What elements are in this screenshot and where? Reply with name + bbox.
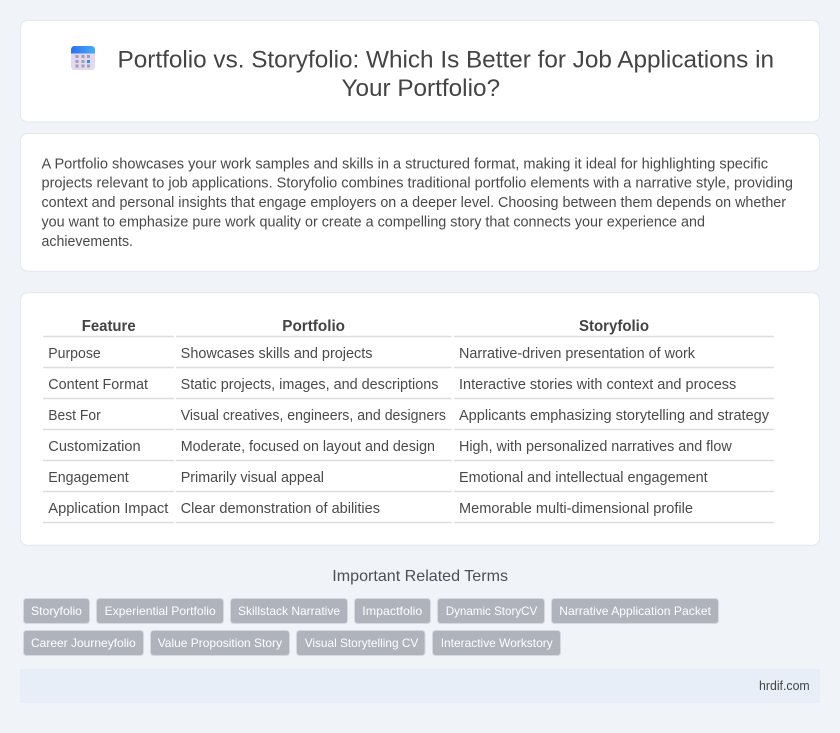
row: content format: Interactive stories with context and process — [459, 377, 736, 393]
row: best for — [48, 408, 770, 424]
tag: Interactive Workstory — [432, 630, 560, 656]
row: purpose: Purpose — [48, 346, 101, 362]
tag: Skillstack Narrative: Skillstack Narrative — [238, 604, 340, 618]
row: content format — [48, 377, 736, 393]
tag: Career Journeyfolio — [24, 630, 144, 656]
tag: Dynamic StoryCV — [438, 598, 544, 624]
row: customization — [48, 439, 732, 455]
table header: Portfolio — [282, 318, 345, 335]
row: customization: High, with personalized narratives and flow — [459, 439, 732, 455]
row: engagement: Primarily visual appeal — [181, 470, 324, 486]
title: Portfolio vs. Storyfolio: Which Is Better for Job Applications in — [118, 46, 774, 74]
intro text: context and personal insights that engage employers on a deeper level. Choosing between them depends on whether — [42, 195, 786, 211]
footer source: hrdif.com — [759, 679, 810, 693]
tag: Dynamic StoryCV: Dynamic StoryCV — [446, 604, 537, 618]
intro text — [42, 156, 793, 250]
panel: title card — [20, 20, 820, 122]
tag: Storyfolio: Storyfolio — [31, 604, 82, 618]
table header: Feature — [82, 318, 136, 335]
row: application impact: Memorable multi-dimensional profile — [459, 501, 693, 517]
tag: Narrative Application Packet: Narrative Application Packet — [559, 604, 712, 618]
row: application impact: Application Impact — [48, 501, 168, 517]
row: content format: Content Format — [48, 377, 148, 393]
tag: Experiential Portfolio — [96, 598, 224, 624]
title: Your Portfolio? — [342, 75, 500, 102]
panel: intro paragraph — [20, 134, 820, 271]
tag: Career Journeyfolio: Career Journeyfolio — [31, 636, 136, 650]
tag: Visual Storytelling CV: Visual Storytelling CV — [305, 636, 418, 650]
tag: Storyfolio — [24, 598, 90, 624]
heading: important related terms: Important Related Terms — [332, 568, 508, 585]
row: application impact — [48, 501, 693, 517]
row: purpose — [48, 346, 696, 362]
footer bar — [20, 669, 820, 703]
row: engagement — [48, 470, 708, 486]
tag: Impactfolio: Impactfolio — [362, 604, 423, 618]
title — [118, 46, 774, 102]
row: customization: Customization — [48, 439, 141, 455]
row: best for: Applicants emphasizing storytelling and strategy — [459, 408, 770, 424]
row: customization: Moderate, focused on layout and design — [181, 439, 435, 455]
tag: Visual Storytelling CV — [296, 630, 425, 656]
row: best for: Visual creatives, engineers, and designers — [181, 408, 446, 424]
tag: Value Proposition Story — [150, 630, 290, 656]
row: engagement: Emotional and intellectual engagement — [459, 470, 708, 486]
row: content format: Static projects, images, and descriptions — [181, 377, 438, 393]
tags: related terms — [24, 598, 718, 656]
panel: comparison table — [20, 293, 820, 545]
icon: calendar — [71, 46, 95, 70]
row: best for: Best For — [48, 408, 101, 424]
intro text: A Portfolio showcases your work samples and skills in a structured format, making it ideal for highlighting specific — [42, 156, 768, 172]
tag: Narrative Application Packet — [552, 598, 718, 624]
tag: Interactive Workstory: Interactive Workstory — [441, 636, 553, 650]
row: purpose: Narrative-driven presentation of work — [459, 346, 696, 362]
tag: Skillstack Narrative — [230, 598, 348, 624]
row: application impact: Clear demonstration of abilities — [181, 501, 380, 517]
row: engagement: Engagement — [48, 470, 129, 486]
intro text: projects relevant to job applications. Storyfolio combines traditional portfolio elements with a narrative style, providing — [42, 176, 793, 192]
tag: Impactfolio — [354, 598, 430, 624]
table rules — [43, 336, 774, 522]
tag: Value Proposition Story: Value Proposition Story — [158, 636, 282, 650]
table header — [82, 318, 649, 335]
intro text: achievements. — [42, 234, 133, 250]
row: purpose: Showcases skills and projects — [181, 346, 372, 362]
tag: Experiential Portfolio: Experiential Portfolio — [105, 604, 216, 618]
table header: Storyfolio — [579, 318, 649, 335]
intro text: you want to emphasize pure work quality or create a compelling story that connects your experience and — [42, 215, 705, 231]
